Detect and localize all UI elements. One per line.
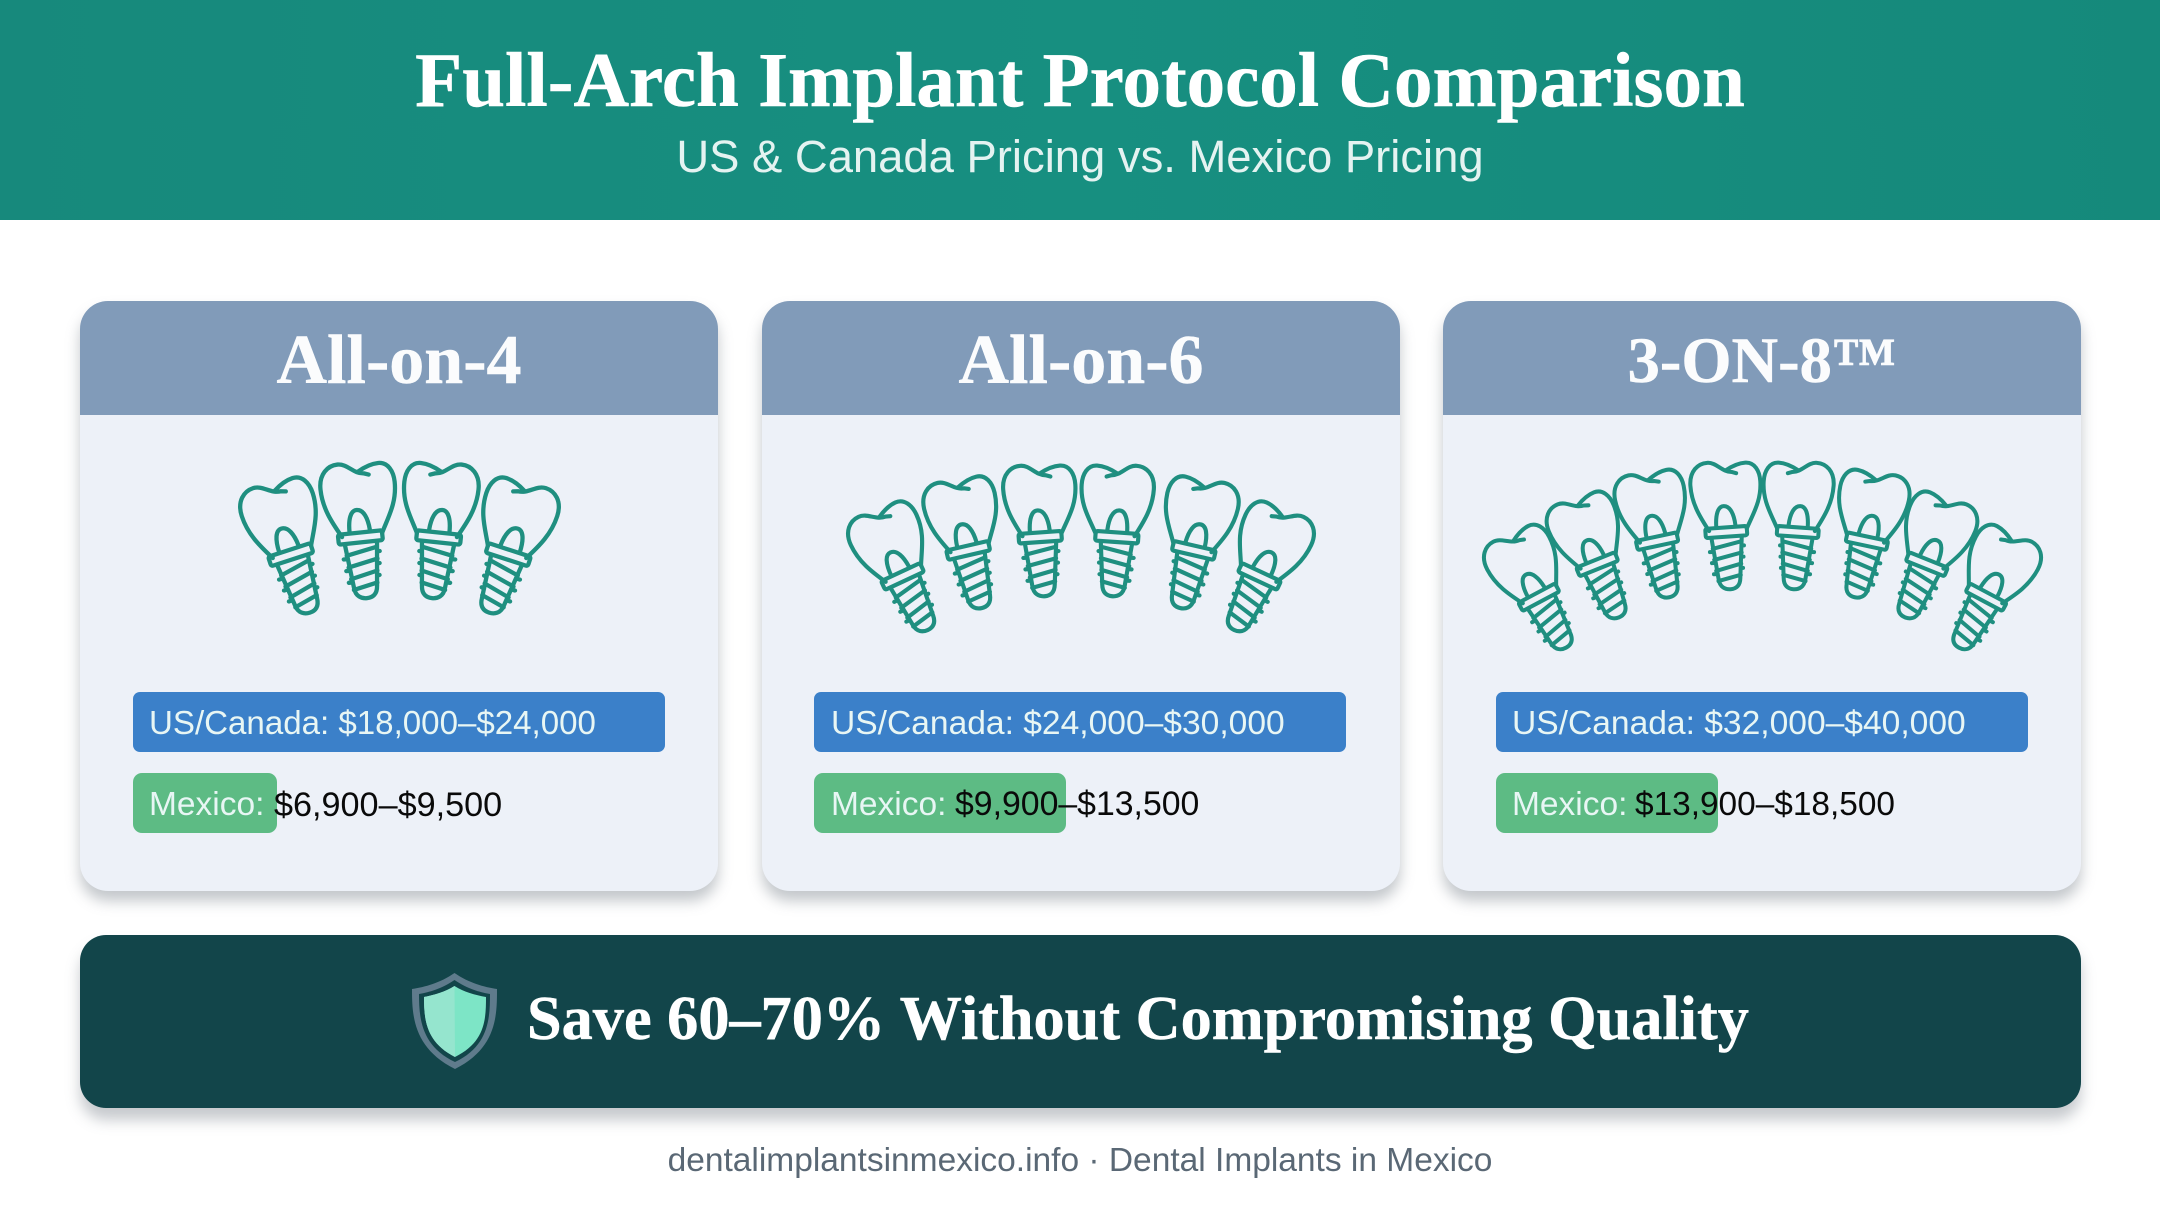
title: Full-Arch Implant Protocol Comparison bbox=[415, 37, 1745, 123]
card heading: All-on-6: All-on-6 bbox=[958, 322, 1204, 399]
panel: All-on-6 bbox=[762, 301, 1400, 891]
Mexico price: $6,900–$9,500 bbox=[274, 786, 502, 824]
US/Canada price text: US/Canada: $24,000–$30,000 bbox=[831, 705, 1285, 742]
icon: shield bbox=[412, 973, 497, 1069]
icon: eight implants bbox=[1477, 459, 2048, 663]
header band bbox=[0, 0, 2160, 220]
subtitle: US & Canada Pricing vs. Mexico Pricing bbox=[676, 131, 1484, 182]
icon: four implants bbox=[235, 459, 564, 623]
banner text: Save 60–70% Without Compromising Quality bbox=[527, 984, 1749, 1053]
Mexico price bar bbox=[133, 773, 277, 833]
card heading: 3-ON-8 bbox=[1443, 301, 2081, 415]
Mexico price bar bbox=[814, 773, 1066, 833]
Mexico label: Mexico: bbox=[831, 786, 946, 823]
panel: All-on-4 bbox=[80, 301, 718, 891]
Mexico label: Mexico: bbox=[1512, 786, 1627, 823]
US/Canada price bar bbox=[1496, 692, 2028, 752]
US/Canada price text: US/Canada: $32,000–$40,000 bbox=[1512, 705, 1966, 742]
card heading: All-on-4: All-on-4 bbox=[276, 322, 522, 399]
US/Canada price bar bbox=[814, 692, 1346, 752]
Mexico label: Mexico: bbox=[149, 786, 264, 823]
panel: 3-on-8 bbox=[1443, 301, 2081, 891]
Mexico price: $13,900–$18,500 bbox=[1635, 786, 1895, 823]
Mexico price: $9,900–$13,500 bbox=[955, 785, 1199, 823]
US/Canada price text: US/Canada: $18,000–$24,000 bbox=[149, 705, 596, 742]
card heading: All-on-4 bbox=[80, 301, 718, 415]
icon: six implants bbox=[841, 462, 1321, 644]
card heading: 3-ON-8: 3-ON-8™ bbox=[1628, 325, 1896, 396]
footer: dentalimplantsinmexico.info · Dental Implants in Mexico bbox=[668, 1142, 1492, 1179]
Mexico price bar bbox=[1496, 773, 1718, 833]
card heading: All-on-6 bbox=[762, 301, 1400, 415]
US/Canada price bar bbox=[133, 692, 665, 752]
savings banner bbox=[80, 935, 2081, 1108]
